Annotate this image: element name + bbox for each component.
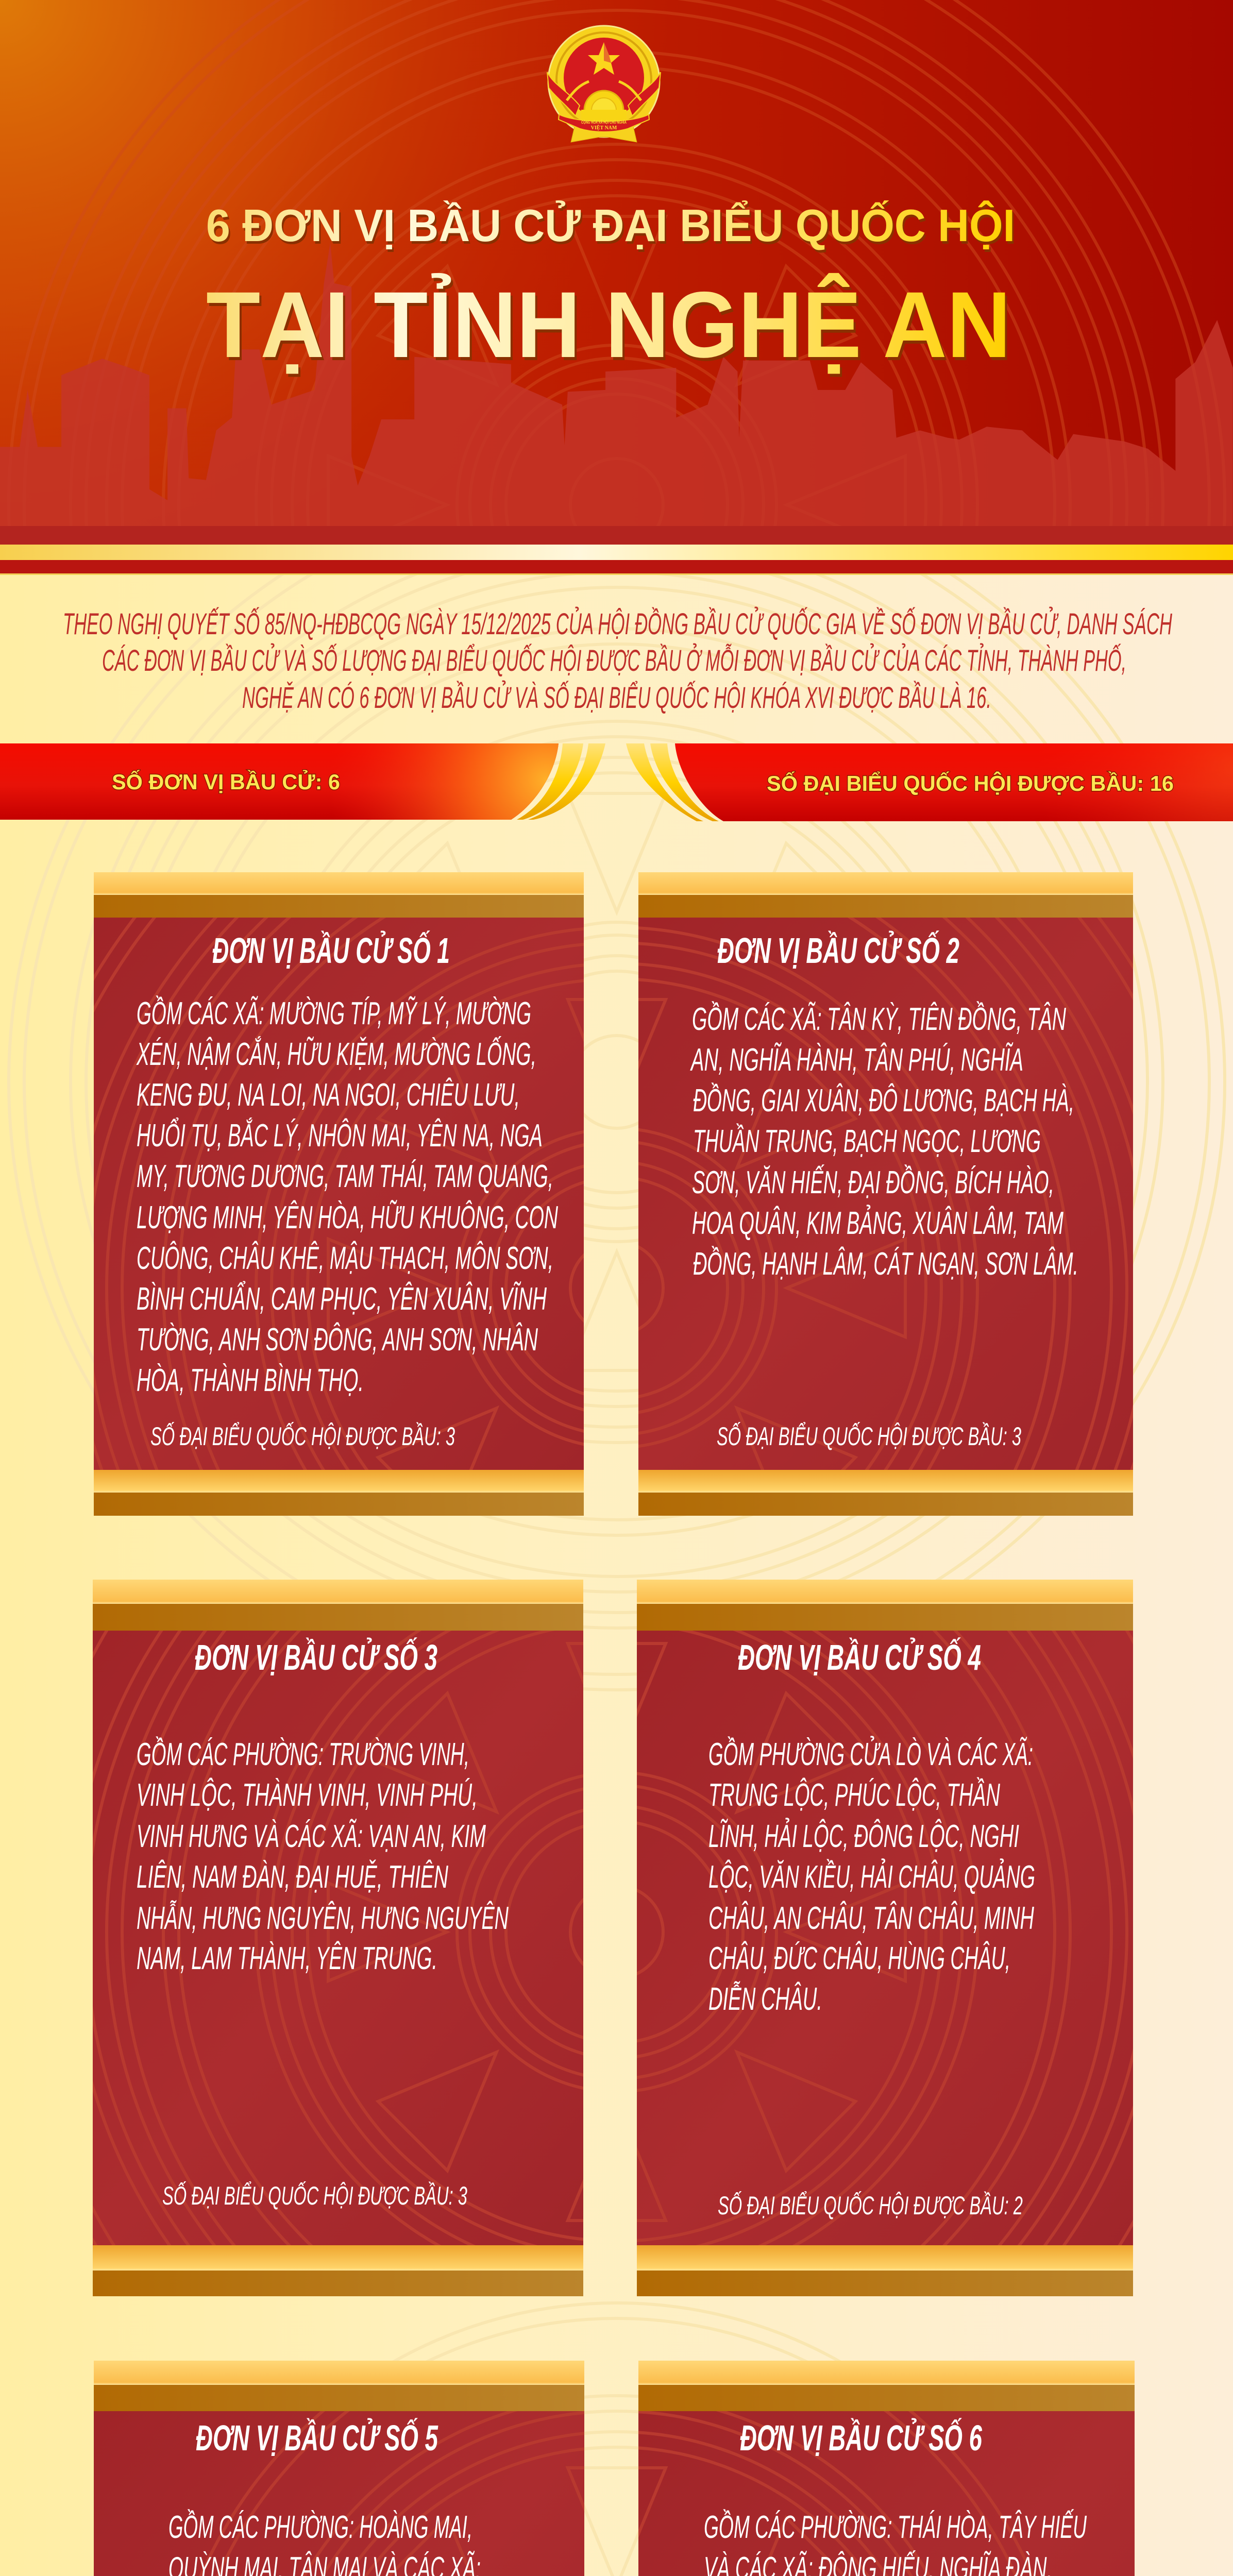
- panel: electoral unit 2: [638, 872, 1133, 1516]
- commune list: [690, 1002, 1078, 1282]
- heading: ĐƠN VỊ BẦU CỬ SỐ 3: [195, 1637, 437, 1677]
- ribbon label left: SỐ ĐƠN VỊ BẦU CỬ: 6: [112, 769, 340, 794]
- city skyline: [0, 243, 1233, 526]
- panel: electoral unit 1: [94, 872, 584, 1516]
- commune list: HÒA, THÀNH BÌNH THỌ.: [137, 1363, 364, 1398]
- title: [206, 200, 1017, 380]
- icon: national emblem: VIỆT NAM: [591, 124, 617, 131]
- ward list: [168, 2510, 502, 2576]
- ribbon: number of deputies: [626, 743, 1233, 821]
- panel: electoral unit 6: [638, 2361, 1135, 2576]
- panel: electoral unit 5: [94, 2361, 584, 2576]
- intro text: [63, 607, 1172, 715]
- ribbon: number of electoral units: [0, 743, 605, 820]
- icon: national emblem: [547, 26, 661, 142]
- heading: ĐƠN VỊ BẦU CỬ SỐ 1: [212, 930, 450, 971]
- ward list: [704, 2510, 1087, 2576]
- page background: [0, 575, 1233, 2576]
- title: 6 ĐƠN VỊ BẦU CỬ ĐẠI BIỂU QUỐC HỘI: [208, 202, 1017, 253]
- header banner: [0, 0, 1233, 575]
- panel: electoral unit 3: [93, 1580, 583, 2296]
- heading: ĐƠN VỊ BẦU CỬ SỐ 5: [196, 2417, 438, 2458]
- ward list: [137, 1737, 509, 1976]
- heading: ĐƠN VỊ BẦU CỬ SỐ 6: [740, 2417, 983, 2458]
- title: TẠI TỈNH NGHỆ AN: [208, 275, 1013, 380]
- heading: ĐƠN VỊ BẦU CỬ SỐ 2: [717, 930, 959, 971]
- ward list: DIỄN CHÂU.: [708, 1981, 822, 2017]
- title line 2: TẠI TỈNH NGHỆ AN: [206, 272, 1011, 377]
- ribbon label right: SỐ ĐẠI BIỂU QUỐC HỘI ĐƯỢC BẦU: 16: [767, 771, 1174, 795]
- ward list: [708, 1736, 1035, 2017]
- commune list: [136, 996, 558, 1398]
- heading: ĐƠN VỊ BẦU CỬ SỐ 4: [738, 1637, 981, 1677]
- title line 1: 6 ĐƠN VỊ BẦU CỬ ĐẠI BIỂU QUỐC HỘI: [206, 200, 1015, 251]
- icon: national emblem: CỘNG HÒA XÃ HỘI CHỦ NGHĨA: [581, 120, 627, 125]
- panel: electoral unit 4: [637, 1580, 1133, 2296]
